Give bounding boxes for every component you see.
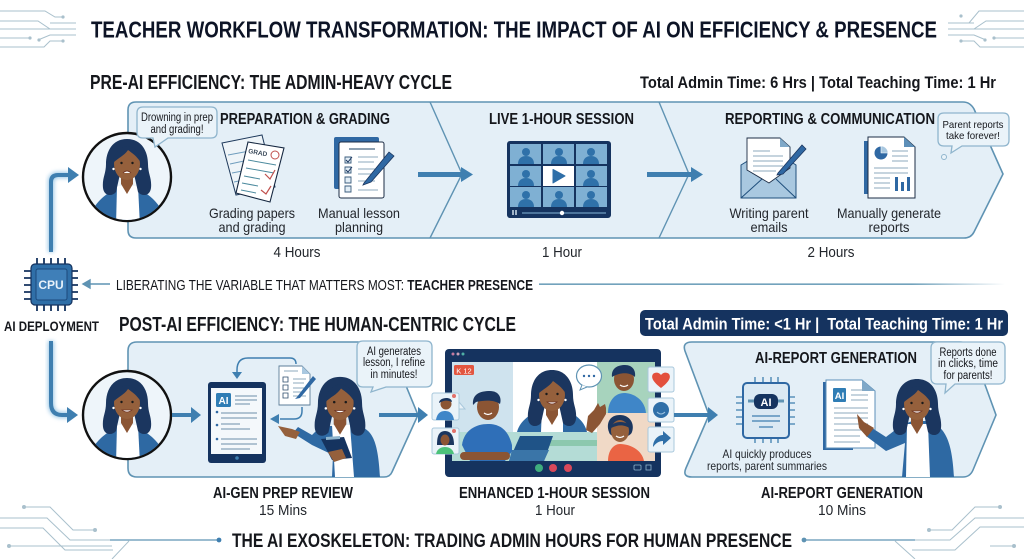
icon: refine loop arrows: [232, 358, 302, 424]
text: AI quickly produces: AI quickly produces: [722, 447, 812, 461]
text: manual lesson planning: planning: [335, 219, 383, 235]
icon: AI chip: [736, 377, 795, 443]
callout: AI generates lesson: [357, 341, 432, 392]
presenter teacher: [517, 370, 587, 432]
text: writing parent emails: Writing parent: [730, 205, 809, 221]
label: enhanced session: 1 Hour: [535, 503, 575, 519]
thumbnail: remote student one: [432, 393, 465, 420]
panel: pre-AI cycle band: [128, 102, 1003, 238]
icon: manual report document: [864, 137, 915, 198]
divider line fading: [539, 284, 1005, 285]
text: grading papers: [209, 205, 295, 235]
callout: reports done in clicks: for parents!: [944, 370, 992, 382]
callout: parent reports take forever: take forever!: [946, 130, 1000, 142]
callout: drowning in prep: [137, 107, 217, 147]
reaction card: share arrow: [648, 427, 674, 452]
arrow: AI deployment down to post-AI teacher: [51, 341, 78, 423]
reaction card: heart: [648, 367, 674, 392]
icon: AI report document: AI: [835, 391, 844, 402]
label: enhanced session: ENHANCED 1-HOUR SESSION: [459, 485, 650, 502]
callout: AI generates lesson: AI generates: [367, 346, 421, 358]
callout: reports done in clicks: Reports done: [940, 347, 996, 359]
callout: reports done in clicks: [931, 342, 1005, 393]
duration: 2 hours: 2 Hours: [808, 245, 854, 261]
badge: K12: K 12: [456, 366, 472, 376]
heading: preparation and grading: PREPARATION & GRADING: [220, 111, 390, 128]
badge: post-AI totals: [640, 310, 1008, 336]
heading: post-AI efficiency: POST-AI EFFICIENCY: THE HUMAN-CENTRIC CYCLE: [119, 314, 516, 336]
waving hand: [586, 403, 606, 433]
callout: reports done in clicks: in clicks, time: [938, 358, 998, 370]
label: AI-gen prep review: AI-GEN PREP REVIEW: [213, 485, 354, 502]
text: writing parent emails: [730, 205, 809, 235]
icon: checklist document: [279, 366, 316, 405]
text: AI quickly produces: [707, 447, 827, 473]
text: manually generate reports: [837, 205, 941, 235]
decoration: circuit lines top right: [948, 11, 1024, 47]
icon: AI tablet: [208, 382, 266, 463]
decoration: circuit lines top left: [0, 11, 76, 47]
duration: 1 hour: 1 Hour: [542, 245, 582, 261]
thumbnail: remote student two: [432, 428, 459, 454]
heading: AI-report generation inside panel: AI-REPORT GENERATION: [755, 350, 917, 367]
icon: calm teacher avatar: [83, 371, 171, 464]
arrow: teacher presence feedback: [83, 280, 110, 288]
text: manually generate reports: reports: [868, 219, 910, 235]
text: grading papers: and grading: [218, 219, 286, 235]
icon: stressed teacher avatar: [83, 133, 171, 226]
text: writing parent emails: emails: [750, 219, 788, 235]
text: manually generate reports: Manually generate: [837, 205, 941, 221]
label: AI-report generation: AI-REPORT GENERATION: [761, 485, 923, 502]
student in foreground: [460, 391, 513, 461]
icon: AI chip: AI: [760, 397, 772, 409]
callout: AI generates lesson: in minutes!: [370, 369, 418, 381]
icon: graded papers: [222, 135, 284, 202]
text: manual lesson planning: [318, 205, 400, 235]
label: AI-gen prep review: 15 Mins: [259, 503, 307, 519]
arrow: avatar to prep review: [172, 407, 201, 423]
icon: CPU chip: CPU: [38, 278, 64, 292]
icon: lesson plan checklist: [334, 137, 394, 198]
heading: live session: LIVE 1-HOUR SESSION: [489, 111, 634, 128]
label: AI-report generation: 10 Mins: [818, 503, 866, 519]
reaction card: smiley: [648, 398, 674, 422]
heading: pre-AI efficiency: PRE-AI EFFICIENCY: THE ADMIN-HEAVY CYCLE: [90, 72, 452, 94]
callout: drowning in prep: Drowning in prep: [141, 112, 213, 124]
call controls: [535, 464, 651, 472]
icon: teacher pointing at report: [857, 379, 954, 477]
arrow: prep to live session: [418, 167, 473, 182]
icon: parent email envelope: [741, 138, 806, 198]
badge: K12: [454, 365, 474, 376]
student top right: [608, 365, 646, 413]
footer headline: THE AI EXOSKELETON: TRADING ADMIN HOURS FOR HUMAN PRESENCE: [232, 530, 792, 552]
callout: parent reports take forever: Parent reports: [942, 119, 1004, 131]
label: AI-gen prep review: [213, 485, 354, 519]
icon: AI report document: [823, 380, 875, 450]
heading: reporting and communication: REPORTING & COMMUNICATION: [725, 111, 935, 128]
text: AI quickly produces: reports, parent summaries: [707, 459, 827, 473]
panel: AI-report generation band: [684, 342, 996, 477]
text: grading papers: Grading papers: [209, 205, 295, 221]
duration: 4 hours: 4 Hours: [274, 245, 320, 261]
text: manual lesson planning: Manual lesson: [318, 205, 400, 221]
icon: CPU chip: [24, 258, 78, 311]
icon: AI tablet: AI: [218, 396, 229, 407]
callout: AI generates lesson: lesson, I refine: [363, 357, 425, 369]
speech bubble dots: [576, 365, 602, 390]
decoration: circuit lines bottom left: [0, 505, 221, 559]
callout: drowning in prep: and grading!: [150, 124, 204, 136]
panel: AI-gen prep review band: [128, 342, 418, 477]
student bottom right: [608, 415, 644, 461]
arrow: AI deployment up to pre-AI teacher: [51, 167, 79, 252]
decoration: circuit lines bottom right: [802, 505, 1024, 559]
arrow: live session to reporting: [647, 167, 703, 182]
callout: parent reports take forever: [938, 113, 1009, 160]
text: liberating the variable: LIBERATING THE VARIABLE THAT MATTERS MOST: TEACHER PRESENCE: [116, 278, 533, 294]
arrow: session to report generation: [674, 407, 718, 423]
panel: enhanced video session window: [445, 349, 661, 477]
label: AI-report generation: [761, 485, 923, 519]
arrow: prep review to session: [379, 407, 428, 423]
label: enhanced session: [459, 485, 650, 519]
label: AI deployment: AI DEPLOYMENT: [4, 318, 99, 334]
icon: video grid: [507, 141, 611, 218]
icon: teacher with clipboard pointing: [278, 377, 380, 477]
icon: graded papers: GRAD: [248, 148, 268, 158]
